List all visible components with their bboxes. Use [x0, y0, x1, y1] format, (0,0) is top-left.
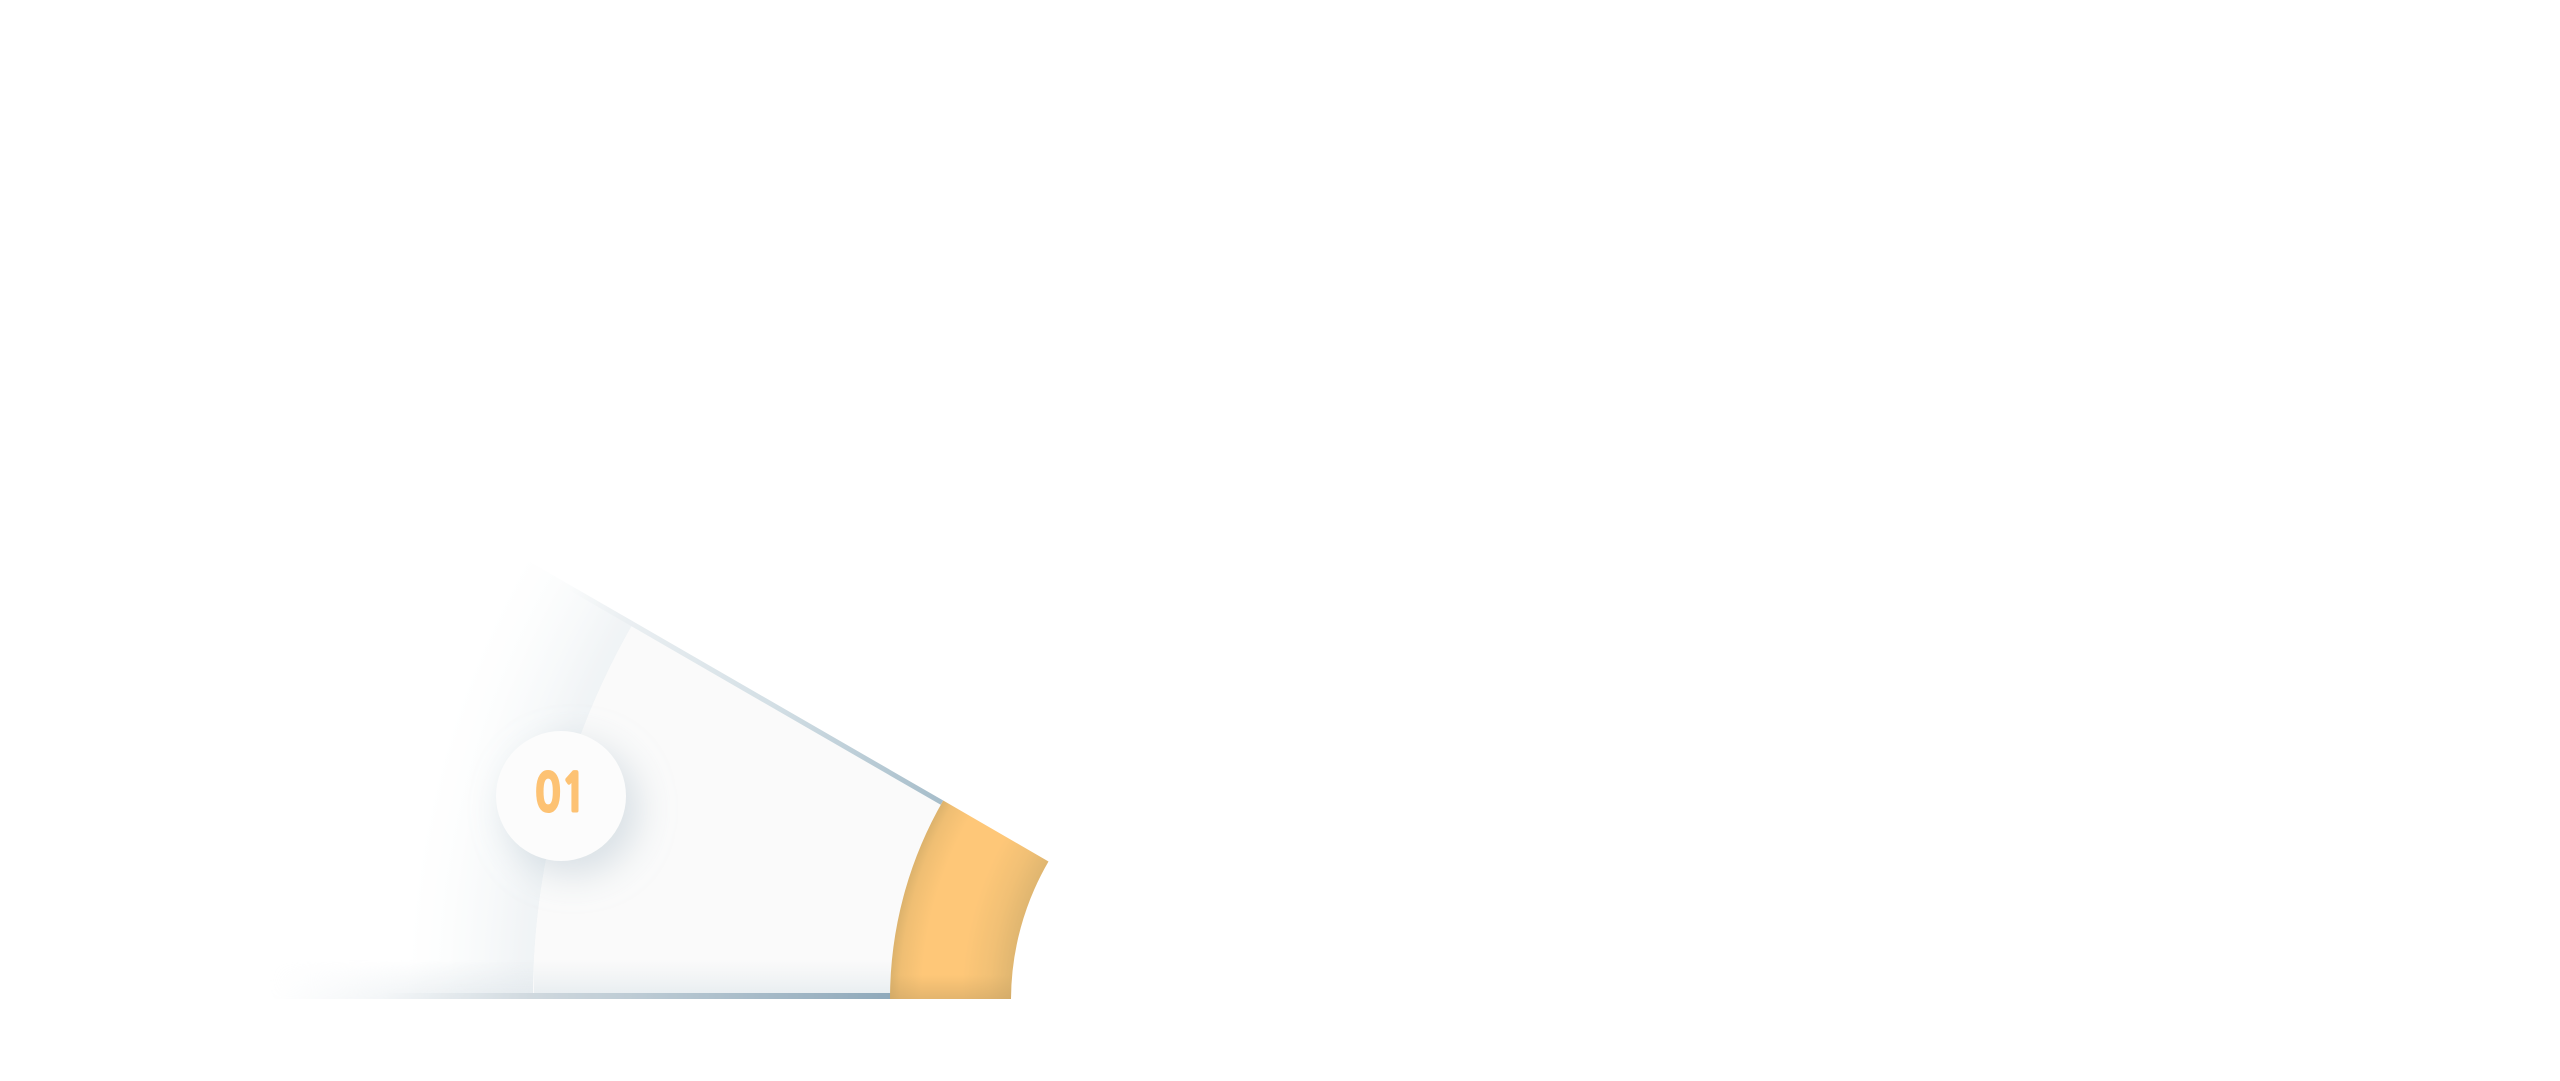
pie slice 01 [347, 592, 1048, 999]
badge circle [496, 731, 626, 861]
infographic canvas [347, 592, 1048, 999]
soft shadow left of the sector [347, 604, 632, 999]
bottom edge band [380, 993, 895, 999]
sector bottom inner shade [534, 960, 894, 993]
badge shadow [507, 743, 639, 875]
orange ring segment [890, 800, 1048, 999]
number badge [496, 731, 639, 875]
badge number: 01 [535, 767, 587, 819]
diagonal edge band [568, 585, 943, 805]
light grey sector [533, 622, 943, 999]
